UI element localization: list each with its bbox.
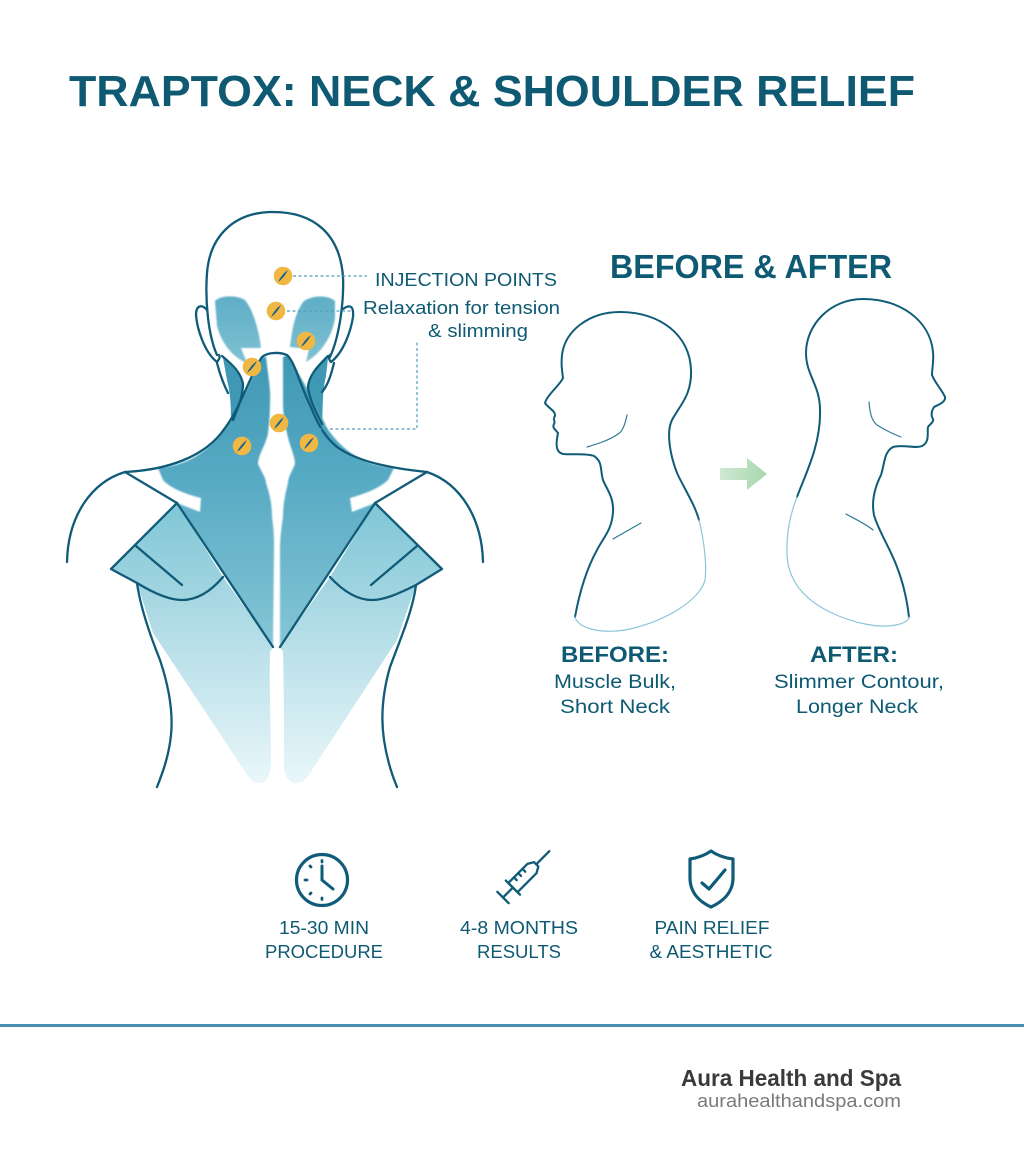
stat: procedure time: 15-30 MIN — [279, 918, 369, 938]
before caption: Muscle Bulk, — [554, 672, 676, 693]
injection points callout text: INJECTION POINTS — [375, 270, 557, 290]
after profile — [787, 299, 945, 626]
injection points — [233, 267, 318, 455]
injection point 2 — [267, 302, 285, 320]
after caption: Slimmer Contour, — [774, 672, 944, 693]
before caption: Short Neck — [560, 697, 671, 718]
after caption — [774, 642, 944, 718]
before caption: BEFORE: — [561, 642, 669, 667]
footer brand: Aura Health and Spa — [681, 1065, 901, 1091]
stat: benefit — [650, 918, 772, 962]
footer brand: aurahealthandspa.com — [697, 1091, 901, 1111]
stat: benefit: PAIN RELIEF — [654, 918, 770, 938]
injection point 3 — [297, 332, 315, 350]
stat: results duration: RESULTS — [477, 942, 561, 962]
callout dashed leader lines — [287, 276, 417, 429]
muscle: side neck strips — [223, 358, 328, 428]
stat: benefit: & AESTHETIC — [650, 942, 772, 962]
injection point 7 — [300, 434, 318, 452]
icon: syringe — [496, 844, 556, 905]
before and after heading: BEFORE & AFTER — [610, 248, 892, 285]
after caption: AFTER: — [810, 642, 898, 667]
arrow — [720, 458, 767, 490]
stat: procedure time — [265, 918, 383, 962]
muscle: upper neck patches — [215, 296, 335, 363]
injection points callout text — [363, 270, 560, 341]
muscle: lats — [137, 577, 416, 783]
injection point 4 — [243, 358, 261, 376]
stat: results duration — [460, 918, 578, 962]
injection point 1 — [274, 267, 292, 285]
before caption — [554, 642, 676, 718]
body outline — [67, 212, 483, 787]
footer divider — [0, 1024, 1024, 1027]
after caption: Longer Neck — [796, 697, 919, 718]
icon: shield — [690, 851, 733, 907]
muscle: scapula areas — [111, 503, 442, 600]
injection point 6 — [233, 437, 251, 455]
injection points callout text: & slimming — [428, 320, 528, 341]
muscle: trapezius — [158, 355, 394, 647]
footer brand — [681, 1065, 901, 1111]
stat: procedure time: PROCEDURE — [265, 942, 383, 962]
injection point 5 — [270, 414, 288, 432]
title: TRAPTOX: NECK & SHOULDER RELIEF — [69, 67, 915, 116]
back anatomy diagram — [67, 212, 483, 787]
icon: clock — [296, 854, 348, 906]
injection points callout text: Relaxation for tension — [363, 297, 560, 318]
before profile — [545, 312, 706, 631]
stat: results duration: 4-8 MONTHS — [460, 918, 578, 938]
